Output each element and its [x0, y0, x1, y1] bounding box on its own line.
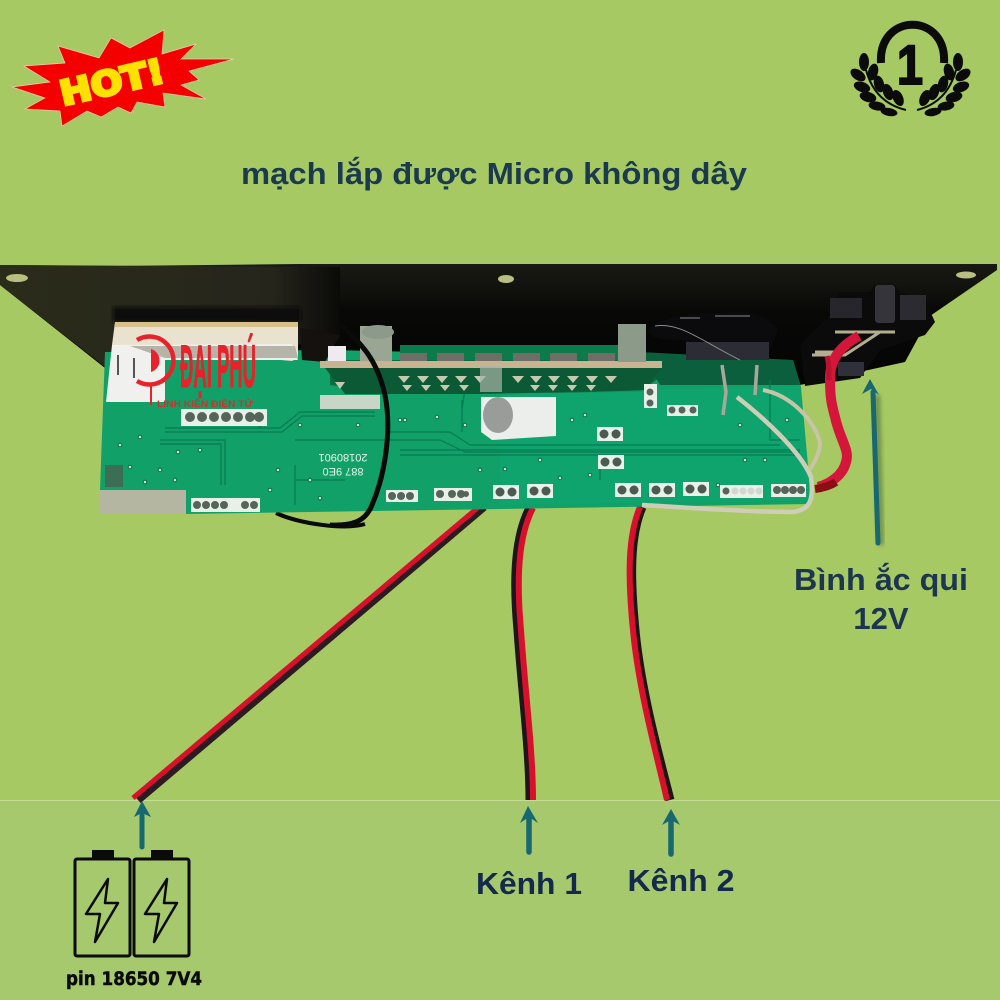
- watermark: Dai Phu logo: [137, 333, 256, 409]
- silk-screen board code: 20180901: [319, 451, 367, 463]
- green circuit board: [100, 350, 811, 514]
- arrow: to battery terminal: [862, 379, 881, 545]
- title: mạch lắp được Micro không dây: [241, 155, 748, 191]
- wire: battery lead: [133, 505, 484, 800]
- icon: hot starburst badge: [12, 30, 234, 126]
- plate mounting holes: [6, 272, 976, 283]
- dark transistor and connector: [300, 325, 394, 366]
- icon: number one laurel award: 1: [897, 33, 923, 96]
- red power wire: [815, 336, 859, 489]
- white wires: [642, 390, 820, 512]
- label: battery 12V: 12V: [853, 601, 909, 636]
- capacitor right: [618, 324, 646, 362]
- arrow: to battery pack lead: [134, 801, 151, 850]
- arrow: channel 2: [662, 809, 680, 857]
- label: battery 12V: [794, 561, 968, 636]
- solder joints row: [335, 376, 617, 391]
- watermark: Dai Phu logo: LINH KIỆN ĐIỆN TỬ: [157, 398, 254, 409]
- soldered metal shield patch: [481, 397, 556, 440]
- board traces: [160, 380, 800, 505]
- label: battery pack: pin 18650 7V4: [66, 969, 202, 990]
- silk-screen board code: [319, 451, 367, 477]
- top-side daughter board: [320, 353, 662, 394]
- wire: channel 2 lead: [630, 507, 670, 800]
- black wire across board: [330, 323, 388, 525]
- black potted connector: [648, 312, 778, 360]
- grey board corner: [99, 490, 186, 514]
- wire: channel 1 lead: [516, 508, 533, 800]
- arrow: channel 1: [520, 806, 538, 855]
- white heat sink bracket: [106, 322, 298, 402]
- solder posts: [722, 365, 757, 415]
- solder pads: [105, 384, 806, 512]
- icon: hot starburst badge: HOT!: [56, 52, 168, 114]
- icon: number one laurel award: [848, 25, 973, 117]
- circuit board photo illustration: [0, 264, 997, 800]
- black rear wire: [276, 513, 365, 526]
- board via dots: [118, 413, 789, 500]
- metal back plate: [0, 264, 997, 385]
- label: battery 12V: Bình ắc qui: [794, 561, 968, 597]
- circuit board photo illustration: ĐẠI PHÚ: [180, 333, 256, 400]
- label: channel 2: Kênh 2: [628, 863, 734, 898]
- right black terminal connector: [800, 285, 935, 386]
- label: channel 1: Kênh 1: [476, 866, 582, 901]
- icon: two lithium batteries: [75, 850, 189, 956]
- silk-screen board code: 887 9E0: [323, 465, 363, 477]
